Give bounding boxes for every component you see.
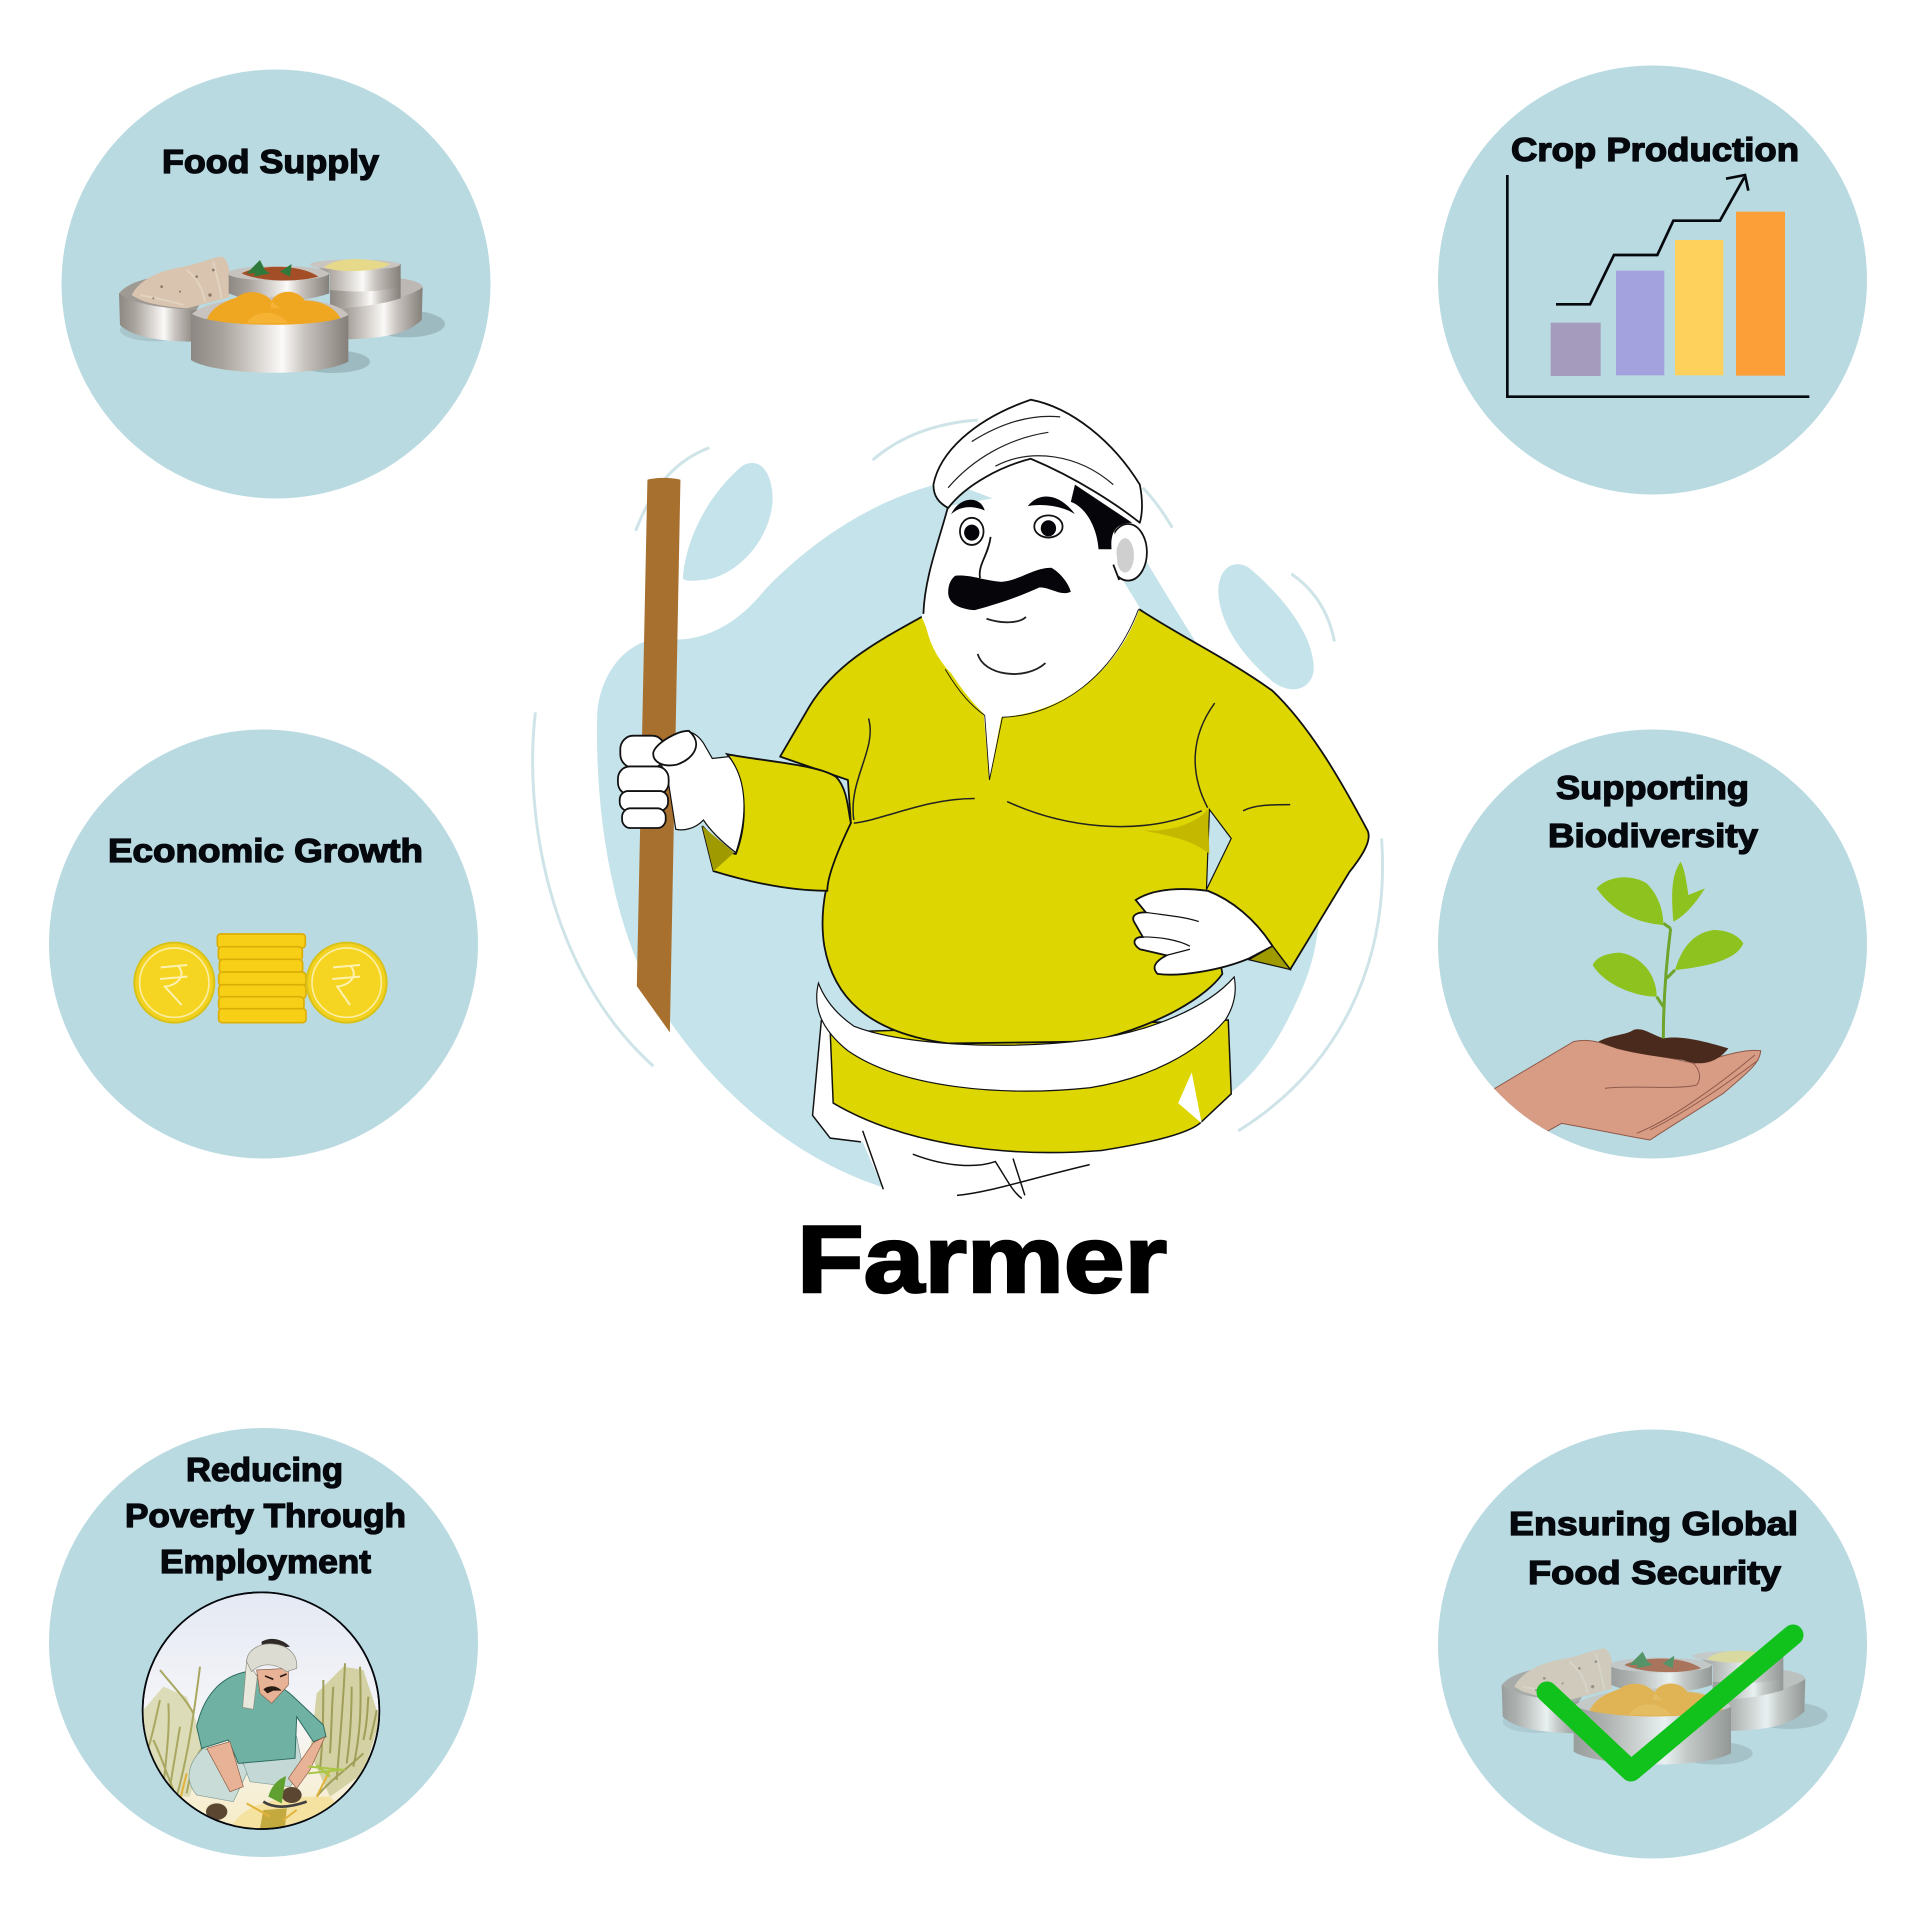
heading: reducing poverty through employment: Poverty Through (125, 1497, 406, 1534)
heading: crop production: Crop Production (1511, 131, 1799, 168)
ear (1109, 524, 1147, 581)
illustration: central farmer (533, 400, 1383, 1198)
heading: reducing poverty through employment (125, 1451, 406, 1580)
decorative motion arcs (533, 420, 1383, 1131)
heading: reducing poverty through employment: Reducing (186, 1451, 343, 1488)
head (924, 485, 1119, 700)
circle: economic growth background (49, 730, 478, 1158)
circle: food security background (1438, 1430, 1867, 1858)
heading: food supply: Food Supply (162, 143, 380, 180)
hair (1071, 485, 1132, 549)
torso and right arm (780, 608, 1369, 1043)
turban (933, 400, 1142, 523)
eyes (960, 515, 1063, 545)
illustration: farmer harvesting (143, 1592, 380, 1833)
heading: reducing poverty through employment: Employment (160, 1543, 371, 1580)
shirt shading (1143, 810, 1209, 854)
heading: ensuring global food security: Food Security (1528, 1554, 1782, 1591)
panel: economic growth (49, 730, 478, 1158)
dhoti (813, 1020, 1125, 1198)
nose (980, 537, 991, 578)
collar outline (945, 609, 1139, 780)
left hand gripping staff (618, 731, 744, 853)
mustache (948, 568, 1071, 610)
gap between arm and body (1206, 810, 1231, 890)
panel: crop production (1438, 66, 1867, 494)
panel: reducing poverty (49, 1428, 478, 1857)
circle: food supply background (62, 70, 490, 498)
icon: faded food bowls (1502, 1648, 1828, 1765)
eyebrows (951, 496, 1075, 514)
collar (922, 565, 1140, 780)
panel: ensuring global food security (1438, 1430, 1867, 1858)
circle: crop production background (1438, 66, 1867, 494)
bar chart: rising production (1507, 175, 1809, 397)
heading: ensuring global food security (1509, 1505, 1798, 1591)
icon: rupee coins (134, 934, 387, 1023)
title: farmer: Farmer (797, 1207, 1167, 1313)
icon: hand holding seedling (1480, 862, 1761, 1160)
heading: ensuring global food security: Ensuring Global (1509, 1505, 1798, 1542)
shirt slit (1178, 1072, 1202, 1123)
panel: food supply (62, 70, 490, 498)
blue background blob (597, 463, 1320, 1187)
wooden staff (637, 478, 680, 1032)
mouth and chin (978, 617, 1045, 674)
circle: biodiversity background (1438, 730, 1867, 1158)
panel: supporting biodiversity (1438, 730, 1867, 1160)
icon: green check mark (1547, 1635, 1793, 1771)
circle: reducing poverty background (49, 1428, 478, 1857)
right hand on hip (1133, 889, 1290, 975)
heading: supporting biodiversity (1548, 769, 1759, 854)
shirt fold lines (853, 703, 1290, 827)
head outline (923, 506, 1119, 614)
heading: economic growth: Economic Growth (108, 832, 423, 869)
waist cloth (817, 977, 1235, 1091)
heading: supporting biodiversity: Biodiversity (1548, 817, 1759, 854)
heading: supporting biodiversity: Supporting (1556, 769, 1749, 806)
icon: food bowls (119, 257, 445, 373)
lower shirt (830, 1020, 1231, 1153)
left sleeve (702, 754, 851, 891)
